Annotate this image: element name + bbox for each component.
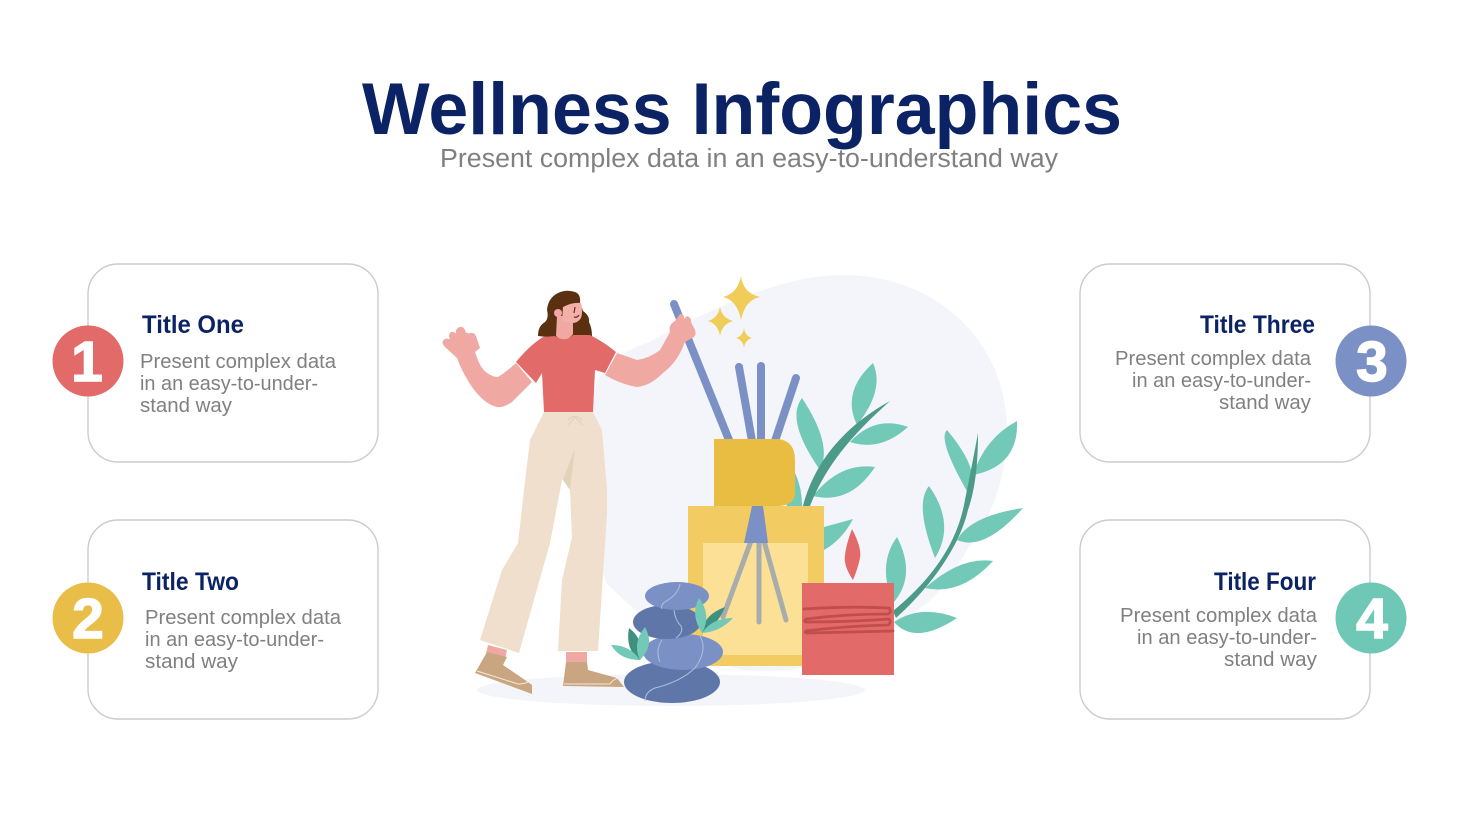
number badge 4 [1336, 582, 1406, 654]
number badge 4: 4 [1356, 587, 1388, 651]
body text [140, 351, 337, 417]
candle [802, 583, 894, 675]
heading: Title Four [1214, 568, 1316, 596]
ground shadow [477, 674, 865, 706]
stem [893, 433, 978, 618]
left leaves on stones [611, 627, 649, 660]
body text: in an easy-to-under- [140, 373, 318, 395]
body text: stand way [140, 395, 232, 417]
trouser fold [563, 448, 575, 490]
medium sparkle [708, 307, 733, 336]
illustration: wellness scene [442, 275, 1023, 706]
palm [448, 332, 476, 356]
small sparkle [736, 328, 752, 348]
right leaves on stones [695, 598, 733, 633]
number badge 2 [52, 582, 124, 654]
body text: Present complex data [140, 351, 337, 373]
right shoe [563, 662, 624, 687]
stem [803, 401, 890, 506]
candle flame [845, 529, 860, 580]
right branch [886, 421, 1023, 633]
reeds above bottle [739, 366, 796, 441]
reeds in neck [744, 506, 768, 543]
left arm and hand [442, 327, 532, 407]
panel: title two [52, 520, 378, 719]
bottom stone [624, 661, 720, 703]
right arm [605, 332, 686, 387]
neck [556, 316, 573, 340]
card outline [88, 264, 378, 462]
left branch [785, 363, 908, 550]
number badge 1 [52, 326, 124, 396]
glass [688, 506, 824, 666]
card outline [1080, 520, 1370, 719]
body text: stand way [1219, 392, 1311, 414]
heading: Title Three [1200, 311, 1315, 339]
body text: in an easy-to-under- [1137, 627, 1317, 649]
trousers [480, 412, 607, 653]
body text: Present complex data [1115, 348, 1312, 370]
card outline [1080, 264, 1370, 462]
left sock [486, 645, 507, 660]
diffuser bottle [688, 506, 824, 666]
liquid [703, 543, 808, 655]
subtitle: Present complex data in an easy-to-understand way [440, 145, 1058, 173]
submerged reeds [723, 541, 786, 622]
ear [554, 309, 562, 317]
third stone [643, 634, 723, 670]
body text: Present complex data [1120, 605, 1318, 627]
long held reed [674, 304, 729, 440]
body text [145, 607, 342, 673]
facial features [574, 307, 579, 317]
face [562, 303, 582, 323]
bottle cap [714, 439, 795, 506]
number badge 1: 1 [71, 330, 103, 394]
top stone [645, 582, 709, 610]
heading: Title One [142, 311, 244, 339]
body text: stand way [145, 651, 238, 673]
shirt [516, 335, 616, 412]
number badge 2: 2 [72, 587, 104, 651]
number badge 3 [1336, 326, 1406, 396]
panel: title one [52, 264, 378, 462]
leaves [785, 363, 908, 550]
body text [1120, 605, 1318, 671]
second stone [633, 605, 701, 639]
body text: Present complex data [145, 607, 342, 629]
body text: in an easy-to-under- [145, 629, 324, 651]
panel: title three [1080, 264, 1406, 462]
candle twine [804, 607, 893, 633]
heading: Title Two [142, 568, 239, 596]
hair [538, 291, 592, 338]
sparkles [708, 276, 760, 348]
title: Wellness Infographics [362, 69, 1122, 150]
body text: stand way [1224, 649, 1317, 671]
stacked stones [611, 582, 733, 703]
body text: in an easy-to-under- [1132, 370, 1311, 392]
woman [442, 291, 696, 694]
held hand [670, 314, 696, 343]
leaves [886, 421, 1023, 633]
stone veins [645, 584, 703, 701]
right sock [566, 652, 587, 663]
drawstring [568, 416, 583, 425]
number badge 3: 3 [1356, 330, 1388, 394]
body text [1115, 348, 1312, 414]
panel: title four [1080, 520, 1406, 719]
left shoe [475, 652, 532, 694]
background blob [589, 275, 1007, 671]
large sparkle [723, 276, 760, 320]
card outline [88, 520, 378, 719]
